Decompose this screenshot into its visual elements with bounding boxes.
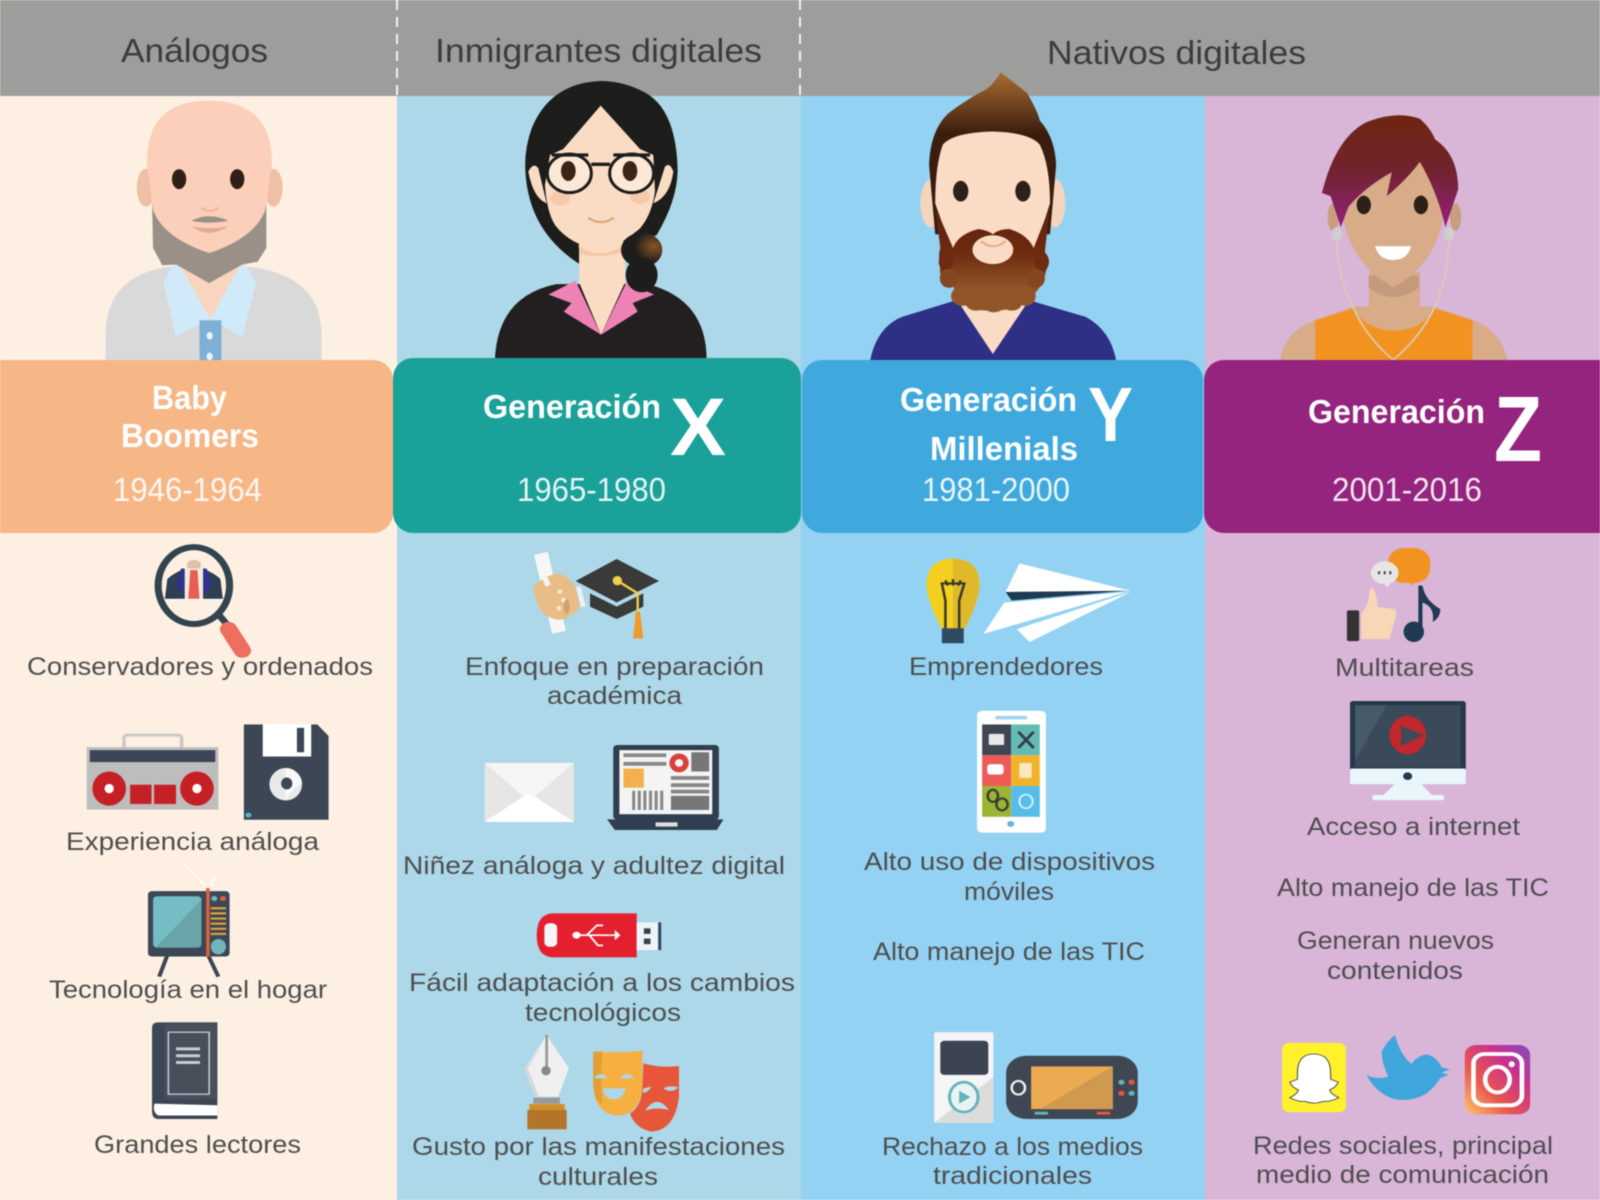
portrait: woman with short hair and earphones [1280,115,1508,362]
text: Fácil adaptación a los cambios tecnológicos: Fácil adaptación a los cambios [409,969,795,997]
years: 1965-1980 [517,471,666,508]
icon: handheld game console [1006,1056,1138,1119]
years: 1981-2000 [922,471,1070,508]
letter Z: Z [1494,377,1542,481]
years: 2001-2016 [1332,471,1482,508]
panel: Baby Boomers column [0,96,397,1200]
text: Enfoque en preparación académica: académica [547,682,682,710]
letter Y: Y [1088,372,1133,458]
icon: paper plane [984,563,1131,642]
text: Alto uso de dispositivos móviles [864,848,1155,906]
portrait: bald man with grey beard [106,101,321,362]
text: Experiencia análoga: Experiencia análoga [66,828,319,856]
heading: Nativos digitales: Nativos digitales [1047,34,1306,71]
text: Acceso a internet: Acceso a internet [1307,813,1520,841]
icon: smartphone with apps [977,711,1046,833]
title: Generación: Generación [1308,393,1485,430]
icon: envelope [485,763,574,822]
icon: diploma and graduation cap [533,553,659,638]
panel: Generación X column [393,81,801,1200]
icon: Instagram [1465,1045,1530,1114]
title: Baby Boomers [121,379,259,454]
portrait: bearded man [870,72,1116,362]
text: Gusto por las manifestaciones culturales: culturales [538,1163,658,1191]
icon: Snapchat [1282,1043,1346,1112]
years: 1946-1964 [113,471,262,508]
icon: Twitter bird [1367,1035,1450,1100]
text: Fácil adaptación a los cambios tecnológicos [409,969,795,1027]
icon: music player [934,1032,993,1123]
text: Generan nuevos contenidos: contenidos [1327,957,1463,985]
header band [0,0,1600,96]
text: Rechazo a los medios tradicionales: Rechazo a los medios [882,1133,1143,1161]
text: Enfoque en preparación académica [465,653,764,710]
text: Enfoque en preparación académica: Enfoque en preparación [465,653,764,681]
title: Generación Millenials [900,381,1078,467]
panel: Generación Y column [801,72,1205,1200]
card: Generación Z [1204,360,1600,533]
text: Rechazo a los medios tradicionales [882,1133,1143,1190]
title: Generación Millenials: Millenials [930,430,1078,467]
text: Gusto por las manifestaciones culturales: Gusto por las manifestaciones [412,1133,785,1161]
text: Grandes lectores: Grandes lectores [94,1131,301,1159]
icon: book [152,1022,217,1119]
text: Multitareas: Multitareas [1335,654,1474,682]
icon: retro television [148,863,230,977]
heading: Inmigrantes digitales: Inmigrantes digitales [435,32,762,69]
icon: magnifier with suit [158,547,242,651]
text: Gusto por las manifestaciones culturales [412,1133,785,1191]
text: Conservadores y ordenados: Conservadores y ordenados [27,653,373,681]
text: Alto uso de dispositivos móviles: móviles [964,878,1054,906]
text: Alto manejo de las TIC: Alto manejo de las TIC [1277,874,1549,902]
title: Generación Millenials: Generación [900,381,1077,418]
icon: light bulb [927,559,980,643]
icon: floppy disk [244,724,329,820]
text: Generan nuevos contenidos: Generan nuevos [1297,927,1494,955]
card: Generación Y Millenials [802,360,1203,533]
icon: boombox [87,735,218,810]
card: Generación X [393,358,801,533]
text: Tecnología en el hogar: Tecnología en el hogar [49,976,327,1004]
icon: desktop monitor with play button [1350,701,1466,800]
text: Niñez análoga y adultez digital: Niñez análoga y adultez digital [403,852,785,880]
card: Baby Boomers [0,360,393,533]
text: Rechazo a los medios tradicionales: tradicionales [933,1162,1092,1190]
icon: USB drive [537,913,661,957]
icon: fountain pen nib [524,1035,569,1129]
letter X: X [670,382,726,473]
text: Redes sociales, principal medio de comunicación [1253,1132,1553,1189]
portrait: woman with glasses [495,81,707,360]
title: Baby Boomers: Baby [152,379,228,416]
title: Generación: Generación [483,388,661,425]
text: Fácil adaptación a los cambios tecnológicos: tecnológicos [525,999,681,1027]
icon: thumbs up, chat bubbles and music note [1347,548,1440,642]
text: Emprendedores: Emprendedores [909,653,1103,681]
text: Redes sociales, principal medio de comunicación: Redes sociales, principal [1253,1132,1553,1160]
title: Baby Boomers: Boomers [121,417,259,454]
text: Alto manejo de las TIC: Alto manejo de las TIC [873,938,1145,966]
panel: Generación Z column [1204,96,1600,1200]
text: Alto uso de dispositivos móviles: Alto uso de dispositivos [864,848,1155,876]
heading: Análogos: Análogos [121,32,268,69]
icon: theatre masks [593,1051,679,1132]
text: Redes sociales, principal medio de comunicación: medio de comunicación [1256,1161,1549,1189]
text: Generan nuevos contenidos [1297,927,1494,985]
icon: laptop [607,745,723,830]
